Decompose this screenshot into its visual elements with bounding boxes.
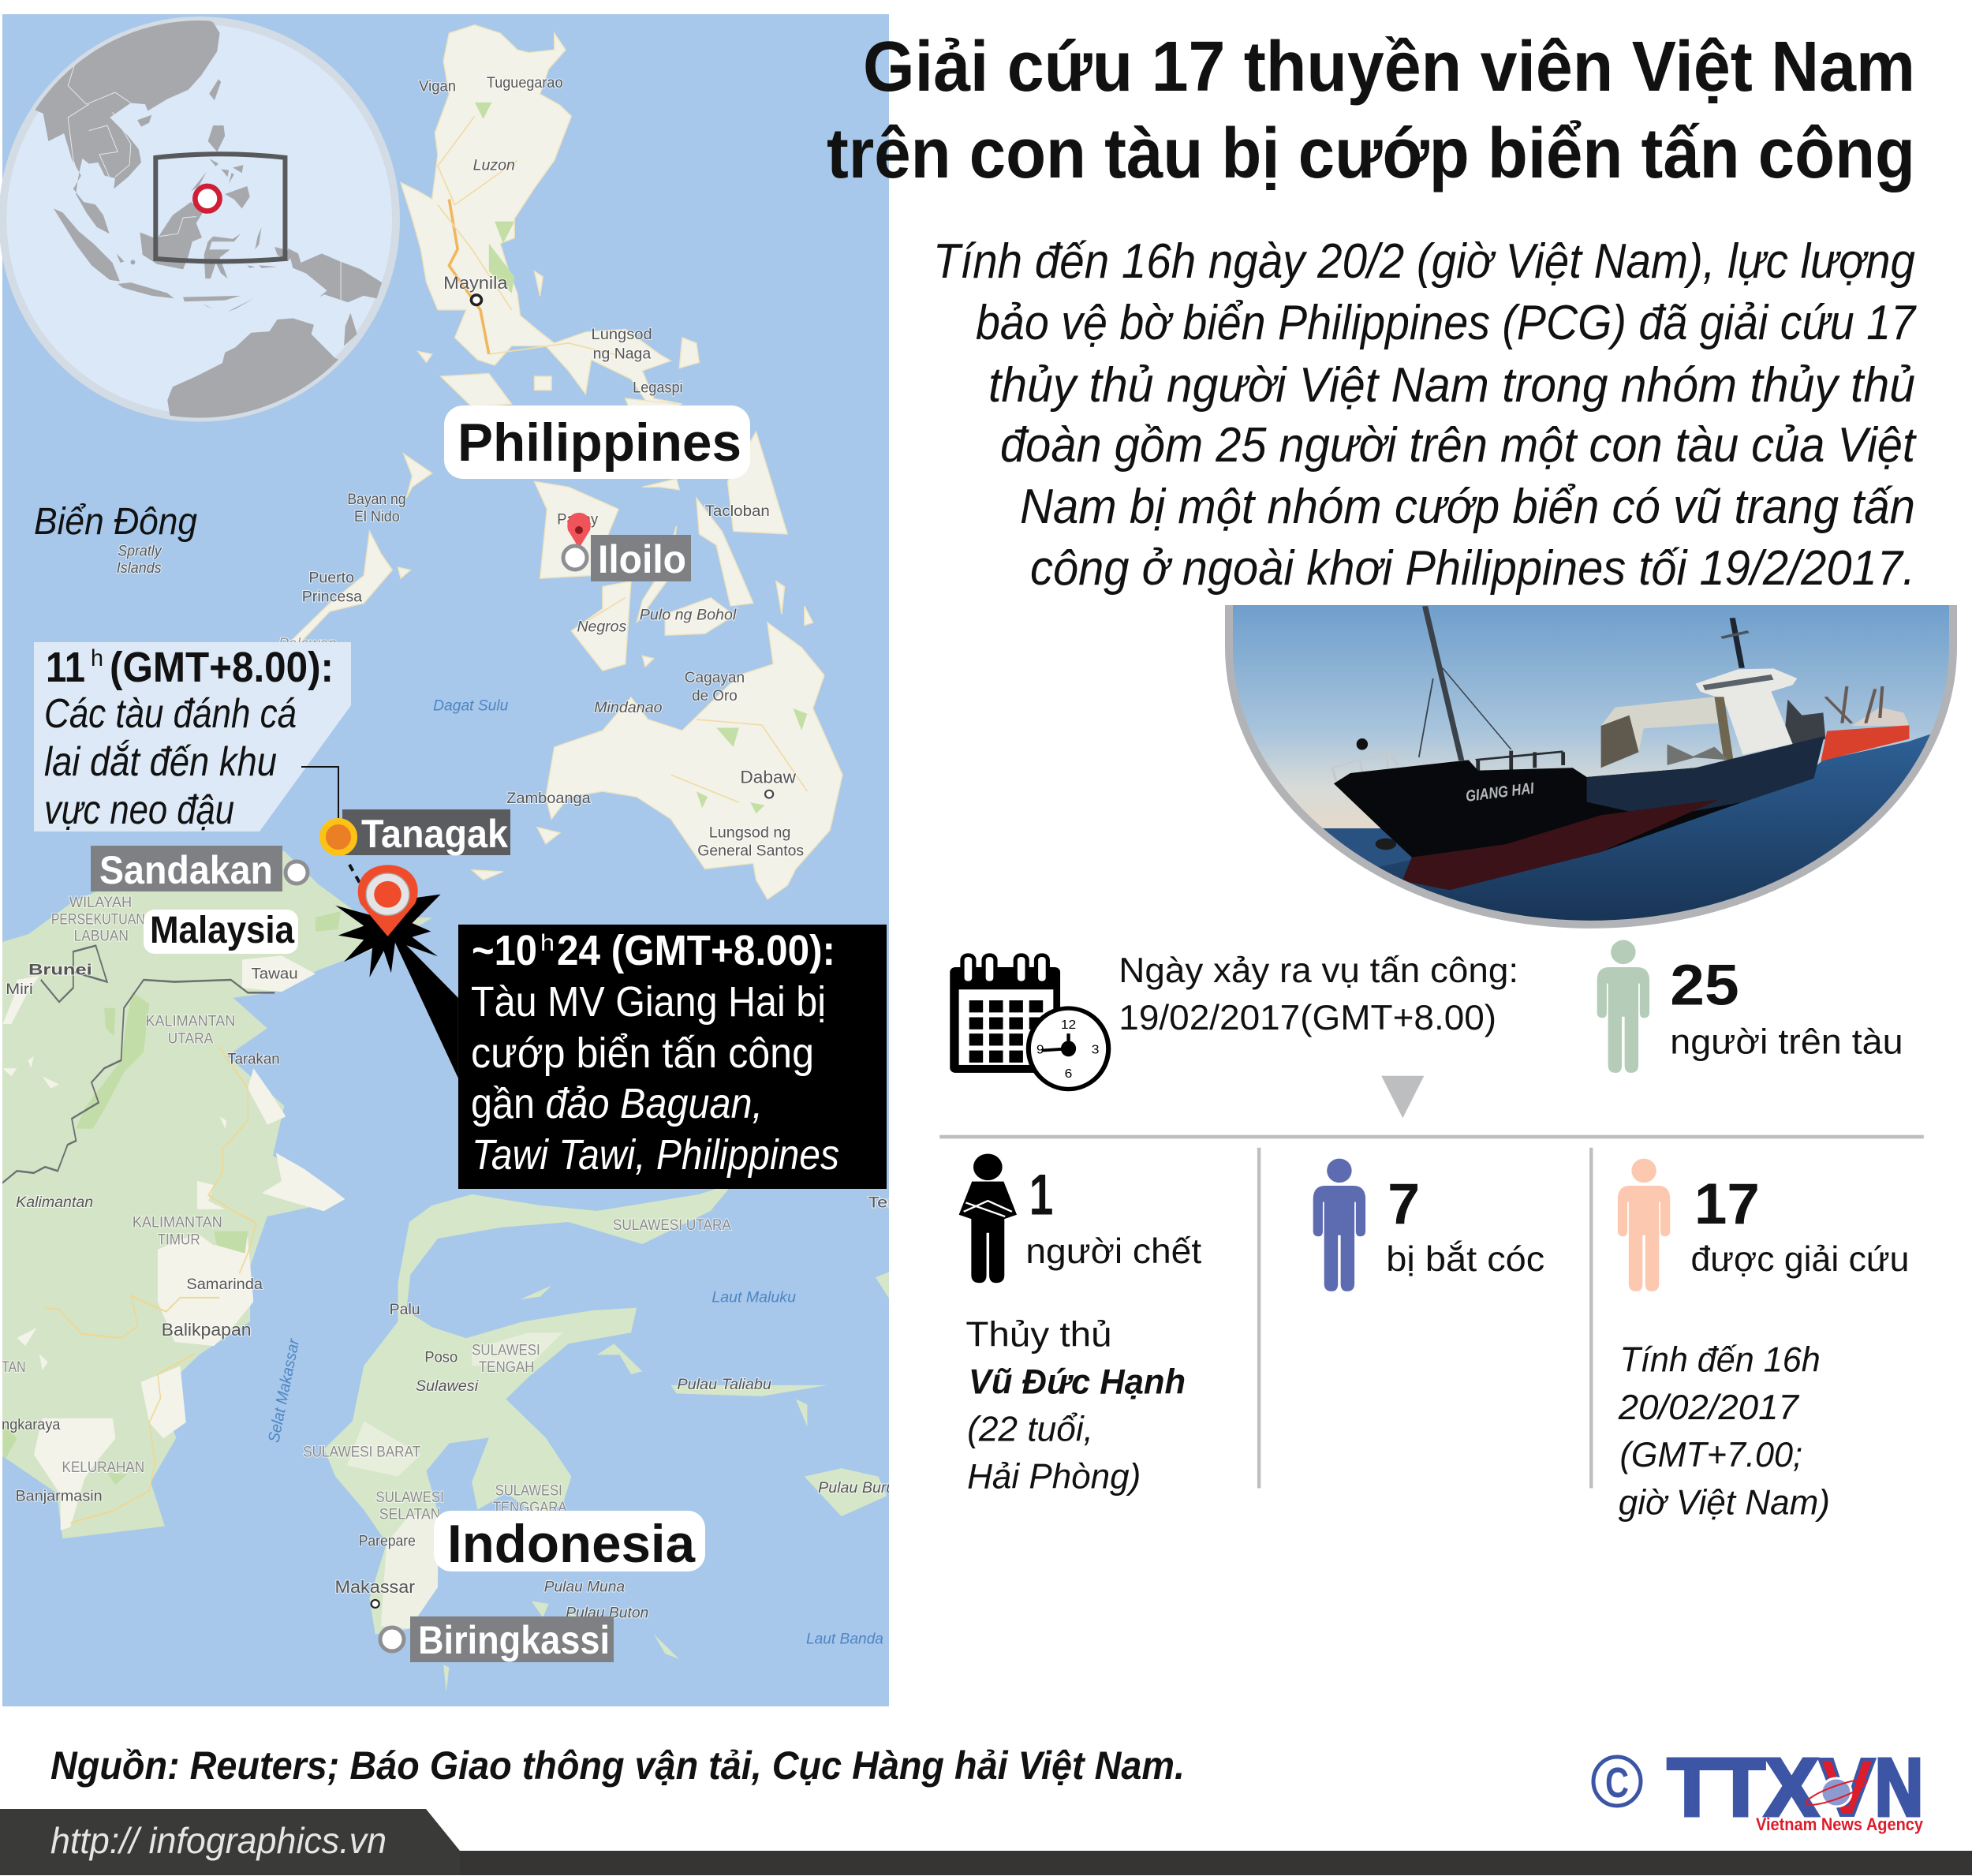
rescue time text: (GMT+7.00;: [1620, 1436, 1802, 1474]
stat: 25 people: [1670, 952, 1903, 1062]
callout: 11h: h: [91, 645, 103, 671]
stat: 17 rescued: [1690, 1172, 1909, 1279]
callout: attack: Tàu MV Giang Hai bị: [471, 978, 826, 1026]
photo: ship: GIANG HAI: [1465, 779, 1535, 805]
map labels: northern Philippines: Cagayan: [685, 669, 745, 686]
map labels: Borneo and Sulawesi: TENGAH: [479, 1358, 534, 1376]
inset globe locator: [2, 0, 396, 435]
copyright icon: C: [1605, 1759, 1629, 1807]
rescue time text: giờ Việt Nam): [1619, 1483, 1830, 1523]
map labels: Borneo and Sulawesi: Laut Maluku: [711, 1289, 796, 1306]
callout: attack: [458, 925, 887, 1189]
intro paragraph: Nam bị một nhóm cướp biển có vũ trang tấn: [1020, 480, 1915, 534]
marker: Iloilo: [563, 513, 691, 581]
icon: calendar and clock: [950, 955, 1108, 1089]
map labels: northern Philippines: Islands: [117, 559, 162, 577]
stat: 1 dead: người chết: [1025, 1232, 1201, 1271]
map labels: Borneo and Sulawesi: Palu: [390, 1301, 420, 1318]
map labels: Borneo and Sulawesi: SULAWESI UTARA: [613, 1216, 731, 1234]
photo: ship: [1229, 605, 1955, 941]
map labels: Borneo and Sulawesi: TAN: [2, 1358, 25, 1376]
icon: person black: [959, 1153, 1017, 1283]
intro paragraph: [933, 234, 1918, 596]
map labels: Borneo and Sulawesi: Parepare: [359, 1533, 416, 1549]
map land: Philippines: [289, 24, 843, 900]
map labels: Borneo and Sulawesi: Pulau Taliabu: [677, 1376, 771, 1393]
map labels: Borneo and Sulawesi: Samarinda: [186, 1276, 263, 1293]
sea label: Bien Dong: Biển Đông: [34, 501, 197, 543]
map labels: Borneo and Sulawesi: Brunei: [28, 962, 92, 978]
map labels: Borneo and Sulawesi: Poso: [424, 1349, 458, 1366]
callout: 11h: 11: [46, 644, 85, 691]
map labels: Borneo and Sulawesi: SULAWESI: [375, 1489, 444, 1506]
icon: person peach: [1618, 1159, 1670, 1291]
map labels: northern Philippines: Zamboanga: [506, 790, 592, 807]
stat: 7 kidnapped: 7: [1387, 1172, 1420, 1236]
masts: [1425, 606, 1462, 760]
source: Nguồn: Reuters; Báo Giao thông vận tải, Cục Hàng hải Việt Nam.: [50, 1743, 1185, 1788]
map labels: Borneo and Sulawesi: KALIMANTAN: [133, 1214, 222, 1231]
map labels: Borneo and Sulawesi: TIMUR: [158, 1231, 200, 1249]
intro paragraph: thủy thủ người Việt Nam trong nhóm thủy thủ: [988, 358, 1915, 413]
map labels: northern Philippines: Princesa: [302, 589, 363, 605]
rescue time text: [1618, 1341, 1830, 1523]
map labels: northern Philippines: Luzon: [473, 157, 515, 174]
map labels: Borneo and Sulawesi: Tarakan: [227, 1051, 280, 1067]
map labels: Borneo and Sulawesi: Pulau Buru: [818, 1479, 894, 1497]
stat: 17 rescued: được giải cứu: [1690, 1240, 1909, 1279]
logo: TTXVN: Vietnam News Agency: [1756, 1814, 1924, 1834]
map labels: Borneo and Sulawesi: SULAWESI: [472, 1342, 540, 1358]
callout: 11h: (GMT+8.00):: [110, 644, 334, 691]
map labels: northern Philippines: Negros: [577, 618, 626, 635]
map labels: Borneo and Sulawesi: Ter: [868, 1194, 894, 1212]
route dashes: [349, 865, 364, 890]
map land: Sulawesi and eastern islands: [324, 1183, 890, 1692]
map land: Borneo: [0, 846, 432, 1538]
rescue time text: 20/02/2017: [1618, 1388, 1799, 1427]
map labels: northern Philippines: Dagat Sulu: [433, 697, 508, 715]
callout: 11h: lai dắt đến khu: [44, 739, 277, 785]
map labels: northern Philippines: Palawan: [278, 635, 337, 652]
footer bar: [0, 1809, 1972, 1875]
icon: calendar and clock: 6: [1065, 1067, 1072, 1081]
map labels: Borneo and Sulawesi: TENGGARA: [493, 1499, 567, 1516]
marker: attack pin: [358, 865, 418, 936]
map labels: Borneo and Sulawesi: ngkaraya: [2, 1416, 61, 1433]
map detail: Philippines roads and forest: [438, 103, 807, 813]
copyright icon: [1593, 1757, 1641, 1807]
logo: TTXVN: V: [1819, 1742, 1875, 1833]
map labels: Borneo and Sulawesi: Selat Makassar: [265, 1336, 304, 1444]
superstructure: [1696, 668, 1804, 755]
map labels: northern Philippines: de Oro: [692, 687, 738, 704]
stat: 1 dead: 1: [1029, 1163, 1053, 1228]
callout: attack: 24 (GMT+8.00):: [557, 927, 835, 974]
victim text: [965, 1315, 1186, 1497]
victim text: Vũ Đức Hạnh: [969, 1362, 1186, 1402]
stat: 7 kidnapped: [1386, 1172, 1544, 1279]
map labels: northern Philippines: Puerto: [308, 570, 354, 587]
leader line: callout to Tanagak: [301, 767, 338, 836]
map labels: Borneo and Sulawesi: Banjarmasin: [15, 1488, 103, 1504]
map labels: Borneo and Sulawesi: SULAWESI BARAT: [303, 1444, 420, 1460]
map labels: northern Philippines: El Nido: [354, 508, 400, 525]
map labels: northern Philippines: Mindanao: [594, 699, 663, 716]
map labels: Borneo and Sulawesi: Balikpapan: [162, 1319, 252, 1340]
marker: Sandakan: Sandakan: [99, 848, 273, 892]
stat: 25 people: 25: [1670, 952, 1739, 1017]
victim text: (22 tuổi,: [967, 1411, 1093, 1449]
rescue time text: Tính đến 16h: [1620, 1341, 1821, 1380]
info group: [939, 940, 1924, 1523]
map labels: Borneo and Sulawesi: Tawau: [252, 966, 298, 982]
icon: person blue: [1313, 1159, 1365, 1291]
map labels: Borneo and Sulawesi: Pulau Buton: [566, 1605, 648, 1621]
intro paragraph: công ở ngoài khơi Philippines tối 19/2/2017.: [1030, 541, 1915, 596]
marker: Biringkassi: Biringkassi: [418, 1618, 610, 1662]
map labels: northern Philippines: Spratly: [118, 543, 162, 559]
map labels: Borneo and Sulawesi: Sulawesi: [416, 1377, 479, 1395]
logo: TTXVN: TTX: [1668, 1742, 1818, 1833]
map labels: Borneo and Sulawesi: Miri: [6, 981, 33, 998]
map labels: northern Philippines: Bayan ng: [347, 491, 406, 508]
date text: [1119, 951, 1518, 1037]
globe landmasses: [35, 21, 382, 418]
map labels: northern Philippines: Pulo ng Bohol: [640, 607, 737, 624]
callout: attack: Tawi Tawi, Philippines: [472, 1131, 839, 1179]
map labels: northern Philippines: Legaspi: [633, 379, 683, 396]
map labels: northern Philippines: Panay: [557, 511, 598, 528]
logo: TTXVN: N: [1875, 1742, 1923, 1833]
callout: 11h: vực neo đậu: [44, 787, 234, 833]
distant red ship: [1851, 708, 1909, 726]
map labels: Borneo and Sulawesi: SULAWESI: [495, 1482, 562, 1499]
callout: attack: ~10: [472, 927, 537, 974]
map labels: Borneo and Sulawesi: KELURAHAN: [62, 1459, 144, 1476]
callout: attack: h: [540, 930, 555, 956]
stat: 17 rescued: 17: [1694, 1172, 1760, 1236]
map labels: northern Philippines: Tacloban: [705, 503, 770, 520]
map labels: Borneo and Sulawesi: WILAYAH: [69, 894, 132, 911]
map labels: northern Philippines: ng Naga: [593, 346, 652, 363]
country label: Philippines: Philippines: [458, 413, 741, 473]
title: Giải cứu 17 thuyền viên Việt Nam: [863, 28, 1915, 107]
map labels: northern Philippines: [117, 74, 804, 859]
date text: 19/02/2017(GMT+8.00): [1119, 999, 1496, 1037]
map labels: Borneo and Sulawesi: Kalimantan: [16, 1194, 93, 1211]
map labels: Borneo and Sulawesi: UTARA: [168, 1030, 214, 1047]
title: [827, 28, 1915, 193]
arrow: down triangle: [1381, 1076, 1424, 1118]
logo: TTXVN: [1668, 1742, 1924, 1834]
map labels: northern Philippines: Lungsod: [592, 326, 652, 343]
map labels: Borneo and Sulawesi: [2, 894, 894, 1647]
map labels: Borneo and Sulawesi: Pulau Muna: [544, 1579, 625, 1595]
victim text: Hải Phòng): [967, 1457, 1141, 1497]
icon: person green: [1597, 940, 1649, 1073]
map labels: northern Philippines: Lungsod ng: [709, 824, 790, 841]
map labels: northern Philippines: Dabaw: [740, 767, 797, 787]
callout: attack: gần đảo Baguan,: [471, 1080, 763, 1127]
footer bar: http:// infographics.vn: [50, 1820, 387, 1861]
victim text: Thủy thủ: [965, 1315, 1112, 1355]
map detail: Borneo patches, roads, border: [2, 911, 345, 1530]
map labels: Borneo and Sulawesi: Makassar: [334, 1576, 416, 1597]
stat: 7 kidnapped: bị bắt cóc: [1386, 1239, 1544, 1279]
icon: calendar and clock: 9: [1036, 1043, 1044, 1056]
callout: attack: cướp biển tấn công: [471, 1030, 814, 1077]
hull: [1334, 736, 1824, 889]
panel: map: [0, 14, 894, 1706]
map labels: Borneo and Sulawesi: PERSEKUTUAN: [51, 911, 145, 928]
map labels: northern Philippines: Maynila: [443, 272, 508, 293]
marker: Iloilo: Iloilo: [598, 537, 686, 581]
explosion and callout pointer: [335, 895, 458, 1078]
stat: 1 dead: [1025, 1163, 1201, 1271]
rails: [1332, 752, 1398, 781]
map labels: Borneo and Sulawesi: LABUAN: [74, 928, 129, 945]
country label: Indonesia: Indonesia: [447, 1514, 696, 1574]
map labels: Borneo and Sulawesi: SELATAN: [379, 1506, 441, 1523]
map labels: Borneo and Sulawesi: Laut Banda: [806, 1631, 883, 1647]
date text: Ngày xảy ra vụ tấn công:: [1119, 951, 1518, 990]
title: trên con tàu bị cướp biển tấn công: [827, 114, 1915, 193]
map labels: Borneo and Sulawesi: KALIMANTAN: [145, 1013, 235, 1030]
anchor: [1376, 839, 1396, 850]
stat: 25 people: người trên tàu: [1670, 1022, 1903, 1062]
intro paragraph: đoàn gồm 25 người trên một con tàu của Việt: [1000, 418, 1918, 473]
callout: 11h: [34, 642, 351, 833]
icon: calendar and clock: 3: [1092, 1043, 1099, 1056]
icon: calendar and clock: 12: [1061, 1018, 1076, 1032]
globe borders: [68, 65, 341, 302]
map labels: northern Philippines: Tuguegarao: [487, 74, 562, 92]
marker: Tanagak: Tanagak: [361, 812, 508, 856]
map labels: northern Philippines: General Santos: [697, 843, 804, 859]
callout: 11h: Các tàu đánh cá: [44, 691, 297, 737]
country label: Malaysia: Malaysia: [150, 910, 294, 951]
map labels: northern Philippines: Vigan: [419, 78, 456, 95]
